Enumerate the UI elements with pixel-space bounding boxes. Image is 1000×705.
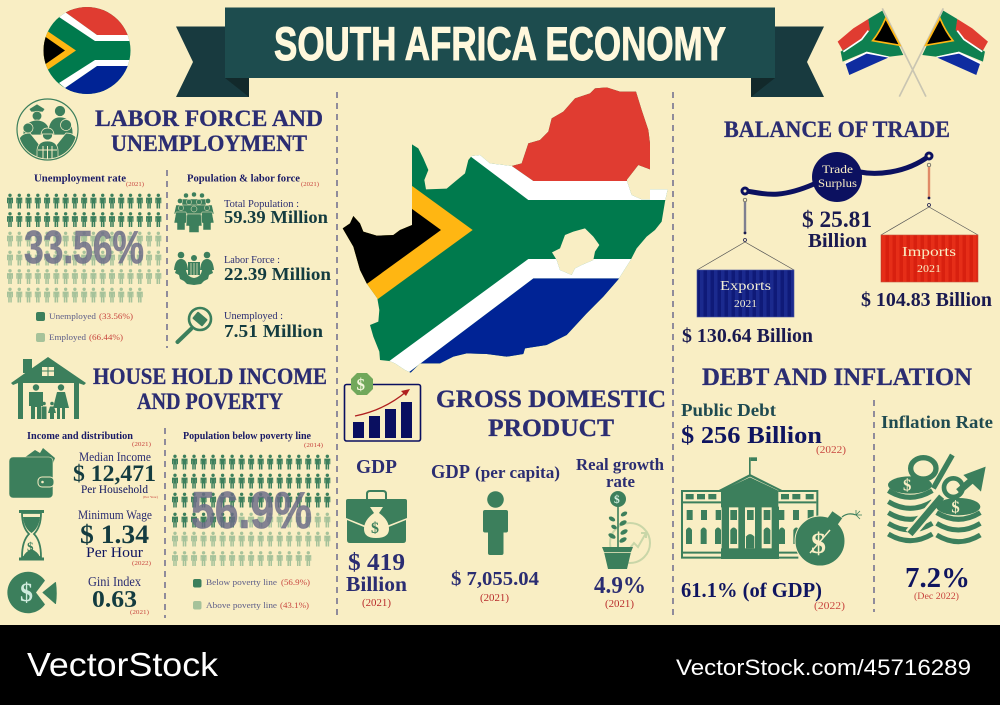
legend: below poverty line: (56.9%) [281, 577, 310, 587]
public debt [681, 400, 846, 456]
exports value: $ 130.64 Billion [682, 325, 813, 347]
icon: crossed flags [838, 8, 988, 97]
total population: 59.39 Million [224, 207, 328, 227]
legend: employed: Employed [49, 332, 87, 342]
exports container [697, 198, 794, 317]
icon: inflation coins: $ [951, 497, 960, 516]
GDP stat: (2021) [362, 598, 391, 609]
inflation value: 7.2% [905, 562, 970, 594]
subheading: population below poverty line: Population below poverty line [183, 431, 311, 442]
GDP per capita stat: (2021) [480, 593, 509, 604]
imports container: 2021 [917, 264, 941, 275]
subheading: unemployment rate: (2021) [126, 181, 144, 188]
heading [93, 364, 327, 414]
icon: government building [681, 457, 818, 559]
imports container: Imports [902, 245, 956, 260]
icon: money plant: $ [614, 493, 620, 506]
panel: debt and inflation [681, 364, 993, 612]
legend: unemployed: (33.56%) [99, 311, 133, 321]
exports container: 2021 [734, 299, 757, 310]
icon: house with family [11, 357, 86, 419]
public debt: (2022) [816, 445, 846, 456]
real growth rate stat: Real growth [576, 455, 665, 474]
big number: 56.9% [191, 482, 312, 540]
trade surplus circle: Surplus [818, 176, 857, 190]
surplus value: Billion [808, 230, 867, 252]
gini index [88, 575, 149, 616]
gini index: (2021) [130, 609, 149, 616]
labor force: Labor Force : [224, 254, 280, 266]
heading: HOUSE HOLD INCOME [93, 364, 327, 389]
footer bar [0, 625, 1000, 705]
icon: magnifier with briefcase [178, 308, 211, 342]
title: SOUTH AFRICA ECONOMY [274, 17, 726, 70]
pictogram: unemployment [7, 194, 161, 302]
imports container [881, 163, 978, 282]
icon: gini pie [7, 572, 56, 613]
legend: above poverty line: (43.1%) [280, 600, 309, 610]
real growth rate stat: 4.9% [594, 573, 646, 599]
minimum wage: $ 1.34 [80, 520, 149, 549]
gini index: 0.63 [92, 587, 137, 613]
subheading: population and labor force: (2021) [301, 181, 319, 188]
minimum wage [78, 507, 152, 567]
unemployed count: 7.51 Million [224, 321, 323, 341]
minimum wage: (2022) [132, 560, 151, 567]
watermark url: VectorStock.com/45716289 [676, 655, 971, 680]
subheading: population below poverty line: (2014) [304, 442, 323, 449]
GDP per capita stat: $ 7,055.04 [451, 568, 539, 590]
subheading: population and labor force [187, 174, 319, 188]
icon: wallet [9, 448, 55, 498]
icon: crowd [174, 192, 214, 232]
trade surplus circle [812, 152, 862, 202]
icon: hourglass [19, 512, 44, 559]
heading: BALANCE OF TRADE [724, 117, 950, 142]
icon: workers circle [17, 99, 78, 162]
total population: Total Population : [224, 198, 299, 210]
surplus value: $ 25.81 [802, 207, 872, 232]
GDP per capita stat: GDP [431, 461, 470, 483]
minimum wage: Per Hour [86, 545, 143, 561]
minimum wage: Minimum Wage [78, 507, 152, 522]
unemployed count [224, 310, 323, 341]
trade surplus circle: Trade [822, 162, 853, 176]
median income [73, 449, 159, 499]
public debt: Public Debt [681, 400, 776, 420]
gini index: Gini Index [88, 575, 141, 590]
GDP stat [346, 456, 407, 609]
icon: round South Africa flag [40, 7, 131, 94]
debt to GDP: 61.1% (of GDP) [681, 578, 822, 602]
subheading: population and labor force: Population & labor force [187, 174, 300, 184]
icon: growth chart [344, 373, 420, 441]
legend: employed: (66.44%) [89, 332, 123, 342]
panel: labor force and unemployment [7, 99, 331, 342]
icon: briefcase with money bag: $ [371, 520, 379, 537]
debt to GDP [681, 578, 845, 612]
debt to GDP: (2022) [814, 601, 845, 612]
subheading: income and distribution: (2021) [132, 441, 151, 448]
real growth rate stat [576, 455, 665, 610]
heading: GROSS DOMESTIC [436, 386, 666, 413]
median income: Per Household [81, 482, 148, 496]
surplus value [802, 207, 872, 252]
GDP stat: GDP [356, 456, 397, 478]
legend: unemployed: Unemployed [49, 311, 97, 321]
map: South Africa flag map [340, 80, 675, 380]
icon: briefcase with money bag [346, 491, 407, 543]
legend: below poverty line [193, 577, 310, 588]
big number: 33.56% [24, 221, 144, 273]
panel: gross domestic product [344, 373, 666, 610]
subheading: income and distribution: Income and distribution [27, 431, 133, 442]
subheading: unemployment rate [34, 174, 144, 188]
pictogram: poverty [172, 455, 330, 566]
panel: household income and poverty [7, 357, 330, 616]
icon: person [483, 491, 508, 555]
icon: labor gear [174, 252, 214, 285]
legend: unemployed [36, 311, 133, 321]
imports value: $ 104.83 Billion [861, 289, 992, 311]
real growth rate stat: rate [606, 472, 635, 491]
GDP stat: Billion [346, 572, 407, 596]
real growth rate stat: (2021) [605, 599, 634, 610]
median income: Median Income [79, 449, 151, 464]
heading: UNEMPLOYMENT [111, 131, 307, 157]
watermark logo text: VectorStock [27, 646, 219, 683]
median income: $ 12,471 [73, 461, 156, 486]
GDP per capita stat: (per capita) [475, 463, 560, 482]
icon: hourglass: $ [27, 539, 34, 554]
subheading: income and distribution [27, 431, 151, 448]
icon: inflation coins: $ [903, 476, 911, 495]
subheading: population below poverty line [183, 431, 323, 449]
rope scale [742, 153, 932, 194]
icon: inflation coins [888, 455, 986, 542]
public debt: $ 256 Billion [681, 423, 822, 449]
heading: PRODUCT [488, 415, 614, 442]
icon: money plant [602, 491, 650, 569]
inflation rate heading: Inflation Rate [881, 412, 993, 432]
heading: DEBT AND INFLATION [702, 364, 972, 391]
heading [95, 106, 323, 157]
legend: employed [36, 332, 123, 342]
heading: LABOR FORCE AND [95, 106, 323, 132]
title banner [176, 8, 824, 97]
icon: gini pie: $ [20, 578, 33, 607]
heading: AND POVERTY [137, 389, 283, 414]
legend: above poverty line [193, 600, 309, 610]
icon: growth chart: $ [356, 375, 366, 394]
inflation value: (Dec 2022) [914, 591, 959, 601]
labor force: 22.39 Million [224, 264, 331, 284]
total population [224, 198, 328, 227]
GDP per capita stat [431, 461, 560, 604]
exports container: Exports [720, 279, 771, 294]
panel: balance of trade [682, 117, 992, 347]
unemployed count: Unemployed : [224, 310, 283, 322]
legend: below poverty line: Below poverty line [206, 577, 277, 587]
icon: debt bomb [795, 510, 862, 566]
heading [436, 386, 666, 442]
labor force [224, 254, 331, 284]
subheading: unemployment rate: Unemployment rate [34, 174, 126, 184]
icon: debt bomb: $ [811, 527, 826, 560]
GDP stat: $ 419 [348, 550, 405, 576]
legend: above poverty line: Above poverty line [206, 600, 277, 610]
median income: (Per Year) [143, 495, 159, 499]
